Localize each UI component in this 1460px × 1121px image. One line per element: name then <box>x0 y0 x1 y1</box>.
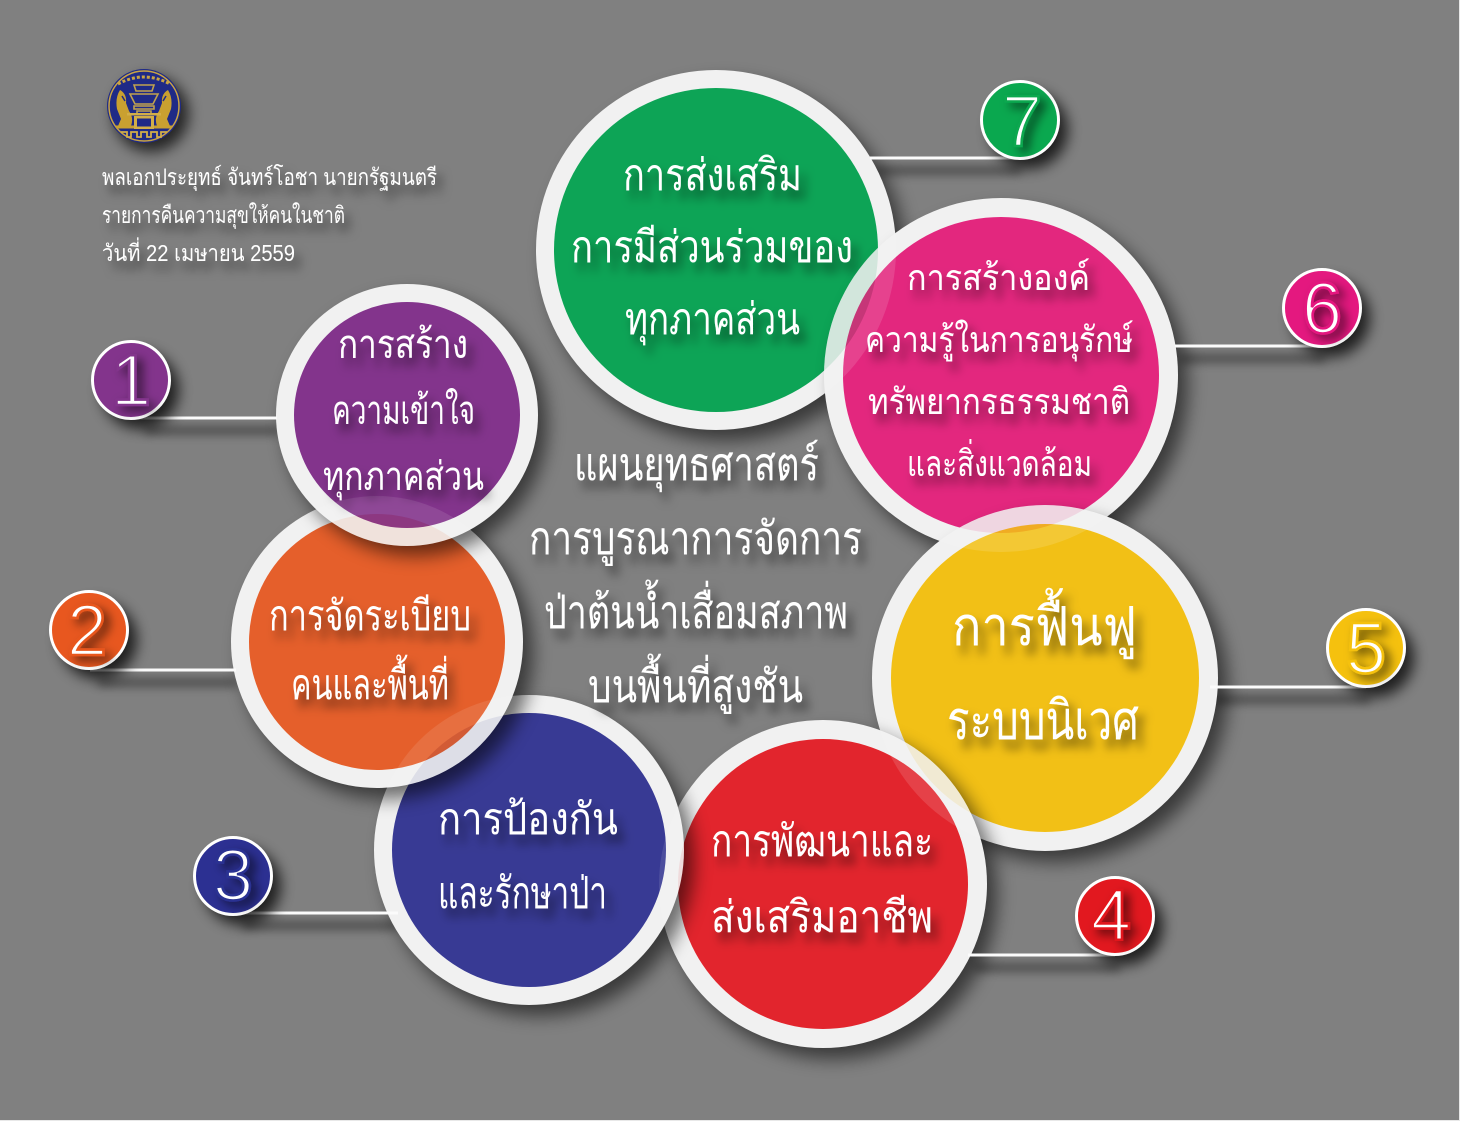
badge 7 <box>982 82 1068 169</box>
central heading text: แผนยุทธศาสตร์ <box>574 438 819 493</box>
header text block: พลเอกประยุทธ์ จันทร์โอชา นายกรัฐมนตรี <box>102 164 437 191</box>
central heading text: ป่าต้นน้ำเสื่อมสภาพ <box>544 579 848 638</box>
panel 7: green circle: การมีส่วนร่วมของ <box>571 223 853 272</box>
badge 2: 2 <box>67 591 107 671</box>
panel 1: purple circle: ทุกภาคส่วน <box>323 455 484 501</box>
panel 5: yellow circle: การฟื้นฟู <box>952 588 1137 659</box>
panel 6: pink circle: ความรู้ในการอนุรักษ์ <box>865 319 1133 362</box>
connector line shadows <box>98 167 1370 971</box>
panel 1: purple circle: การสร้าง <box>338 323 468 367</box>
panel 6: pink circle <box>821 198 1198 552</box>
panel 2: orange circle: คนและพื้นที่ <box>291 654 449 708</box>
header text block <box>102 164 437 266</box>
panel 6: pink circle: ทรัพยากรธรรมชาติ <box>868 381 1130 422</box>
badge 6: 6 <box>1302 269 1342 349</box>
header text block: รายการคืนความสุขให้คนในชาติ <box>102 202 345 229</box>
badge 3: 3 <box>213 836 253 916</box>
badge 5 <box>1328 609 1414 697</box>
panel 7: green circle: ทุกภาคส่วน <box>625 295 800 346</box>
panel 6: pink circle: และสิ่งแวดล้อม <box>907 439 1092 484</box>
panel 2: orange circle: การจัดระเบียบ <box>269 592 471 639</box>
panel 4: red circle: ส่งเสริมอาชีพ <box>711 893 933 942</box>
panel 5: yellow circle <box>872 504 1238 872</box>
badge 1: 1 <box>111 341 151 421</box>
panel 5: yellow circle: ระบบนิเวศ <box>947 691 1139 751</box>
central heading text: บนพื้นที่สูงชัน <box>588 653 803 714</box>
badge 2 <box>50 591 137 679</box>
header text block: วันที่ 22 เมษายน 2559 <box>102 237 295 266</box>
panel 3: blue circle <box>374 695 706 1026</box>
panel 3: blue circle: และรักษาป่า <box>438 869 607 918</box>
badge 6 <box>1284 269 1370 357</box>
panel 6: pink circle: การสร้างองค์ <box>907 257 1090 298</box>
badge 1 <box>92 341 179 429</box>
central heading text <box>529 438 862 714</box>
panel 7: green circle <box>536 70 906 441</box>
badge 4: 4 <box>1091 876 1131 956</box>
panel 4: red circle <box>664 720 1007 1069</box>
connector lines <box>90 156 1366 956</box>
badge 4 <box>1076 876 1163 965</box>
central heading text: การบูรณาการจัดการ <box>529 512 862 566</box>
badge 3 <box>194 836 281 925</box>
panel 1: purple circle: ความเข้าใจ <box>332 387 475 433</box>
badge 7: 7 <box>1002 82 1042 162</box>
panel 7: green circle: การส่งเสริม <box>623 151 802 200</box>
panel 2: orange circle <box>231 510 543 812</box>
badge 5: 5 <box>1346 609 1386 689</box>
panel 4: red circle: การพัฒนาและ <box>711 817 933 866</box>
logo: government seal <box>107 69 189 152</box>
panel 1: purple circle <box>275 284 557 569</box>
panel 3: blue circle: การป้องกัน <box>438 795 618 844</box>
